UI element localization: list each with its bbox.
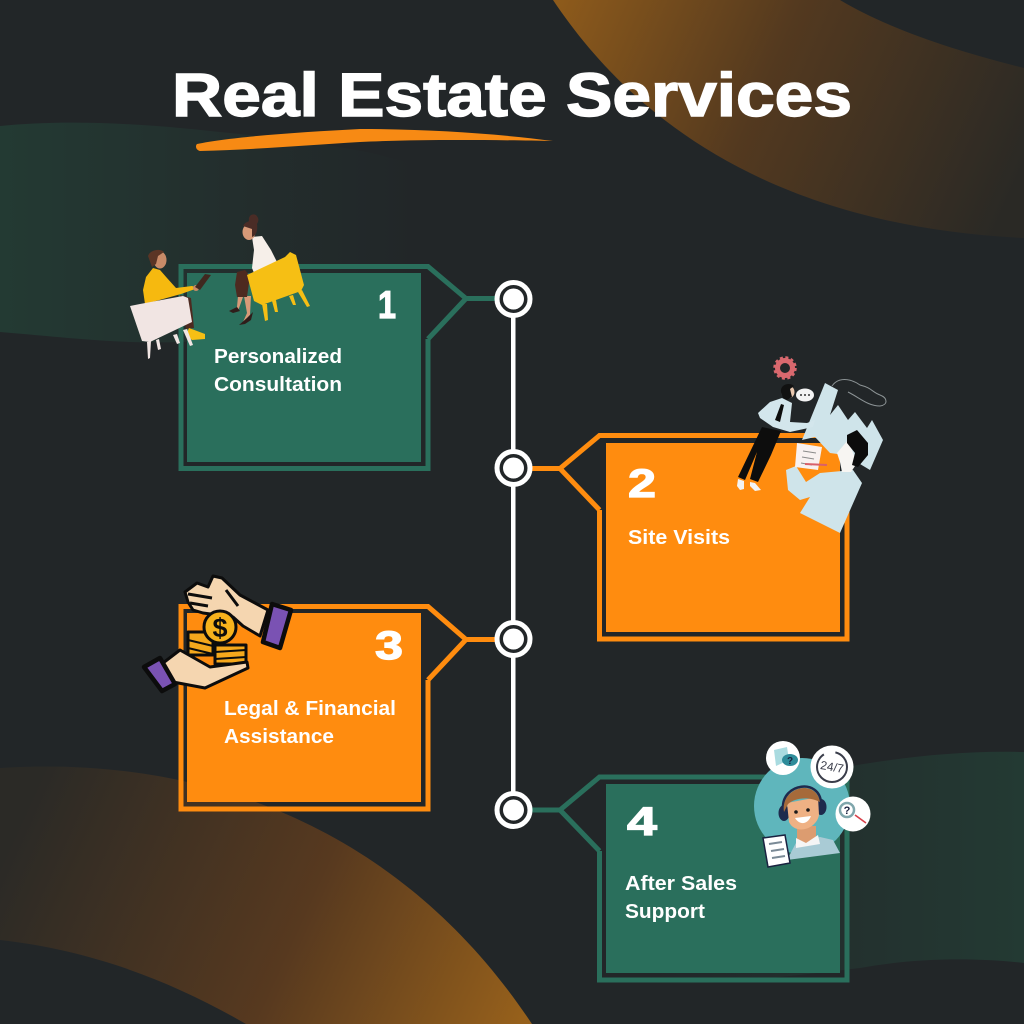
- panel: step 4 after sales support: [530, 777, 847, 980]
- timeline node 3: [497, 622, 530, 656]
- card 1 label: Personalized: [214, 346, 342, 368]
- upper hand: [185, 576, 268, 636]
- background shape: top-right orange arc: [553, 0, 1024, 238]
- card 2 label: Site Visits: [628, 527, 730, 549]
- seated man: clipboard: [795, 443, 822, 470]
- card 4 label: Support: [625, 901, 705, 923]
- illustration: site visit team with factory: [737, 358, 886, 533]
- panel: step 3 legal and financial assistance: [181, 606, 497, 809]
- standing man: shoes: [737, 479, 761, 491]
- man folder: [195, 274, 211, 290]
- dollar coin: [204, 611, 236, 643]
- headset: [778, 805, 790, 821]
- right coin stack: [215, 645, 246, 664]
- woman heels: [229, 307, 253, 325]
- card 1 outline: [181, 266, 497, 468]
- card 4 label: [625, 873, 737, 923]
- lower cuff: [144, 658, 175, 691]
- standing man: head: [782, 386, 794, 398]
- man shirt: [143, 268, 198, 304]
- 24/7 badge: [810, 746, 854, 788]
- woman legs: [232, 296, 251, 322]
- card 2 outline: [530, 436, 847, 639]
- timeline node 4: [497, 794, 530, 826]
- agent face: [787, 797, 819, 829]
- agent collar: [796, 835, 820, 848]
- lower hand: [163, 650, 248, 688]
- woman shirt: [252, 236, 277, 273]
- card 3 label: Legal & Financial: [224, 698, 396, 720]
- standing man: tie: [775, 404, 784, 422]
- illustration: customer support agent: ?: [787, 756, 793, 767]
- card 1 label: Consultation: [214, 374, 342, 396]
- man head: [154, 252, 166, 268]
- card 3 number: 3: [375, 624, 403, 668]
- card 1 fill: [187, 273, 421, 462]
- card 3 label: Assistance: [224, 726, 334, 748]
- timeline connector: [511, 299, 516, 810]
- left coin stack: [188, 632, 213, 655]
- panel: step 2 site visits: [530, 436, 847, 639]
- dollar sign: $: [212, 613, 228, 643]
- panel: step 1 personalized consultation: [181, 266, 497, 468]
- illustration: customer support agent: 24/7: [819, 758, 845, 776]
- standing man: shirt and arm: [758, 398, 815, 432]
- seated man: hair: [847, 430, 868, 467]
- seated man: body: [786, 466, 862, 533]
- timeline node 1: [497, 282, 530, 316]
- standing man: pants: [738, 427, 781, 482]
- speech bubble: [796, 388, 814, 402]
- woman yellow armchair: [247, 252, 304, 305]
- title underline brush stroke: [196, 129, 553, 151]
- card 4 label: After Sales: [625, 873, 737, 895]
- timeline node 2: [497, 452, 530, 484]
- card 4 fill: [606, 784, 840, 973]
- gear icon: [778, 360, 792, 376]
- illustration: customer support agent: [754, 741, 870, 867]
- agent shirt: [787, 837, 840, 860]
- illustration: customer support agent: ?: [844, 805, 851, 817]
- card 3 label: [224, 698, 396, 748]
- card 3 outline: [181, 606, 497, 809]
- seated man: head: [837, 440, 857, 472]
- card 3 fill: [187, 613, 421, 802]
- man shoe: [186, 328, 205, 340]
- woman skirt: [235, 270, 250, 297]
- magnifier badge: [836, 796, 870, 832]
- illustration: hands exchanging coins: [144, 576, 291, 691]
- woman head: [242, 224, 256, 240]
- background shape: left green band: [0, 123, 430, 342]
- title: Real Estate Services: [172, 61, 852, 129]
- agent hair: [784, 788, 820, 812]
- teal circle: [754, 758, 850, 854]
- man pants: [180, 295, 194, 329]
- card 4 number: 4: [627, 800, 658, 844]
- agent neck: [797, 826, 816, 846]
- FAQ badge: [766, 741, 800, 775]
- man white armchair: [130, 296, 192, 342]
- clipboard: [763, 835, 790, 867]
- timeline vertical line: [511, 299, 516, 810]
- card 2 fill: [606, 443, 840, 632]
- agent eyes and smile: [794, 808, 811, 823]
- background shape: right green band: [640, 752, 1024, 985]
- card 4 outline: [530, 777, 847, 980]
- man hand: [193, 285, 199, 291]
- background shape: bottom-left orange arc: [0, 766, 532, 1024]
- factory silhouette: [802, 383, 883, 470]
- card 1 label: [214, 346, 342, 396]
- card 2 number: 2: [628, 462, 656, 506]
- upper cuff: [263, 604, 291, 648]
- illustration: two people in armchairs: [130, 214, 310, 359]
- card 1 number: 1: [378, 284, 396, 327]
- smoke line: [832, 380, 886, 406]
- seated man: pencil: [805, 464, 827, 465]
